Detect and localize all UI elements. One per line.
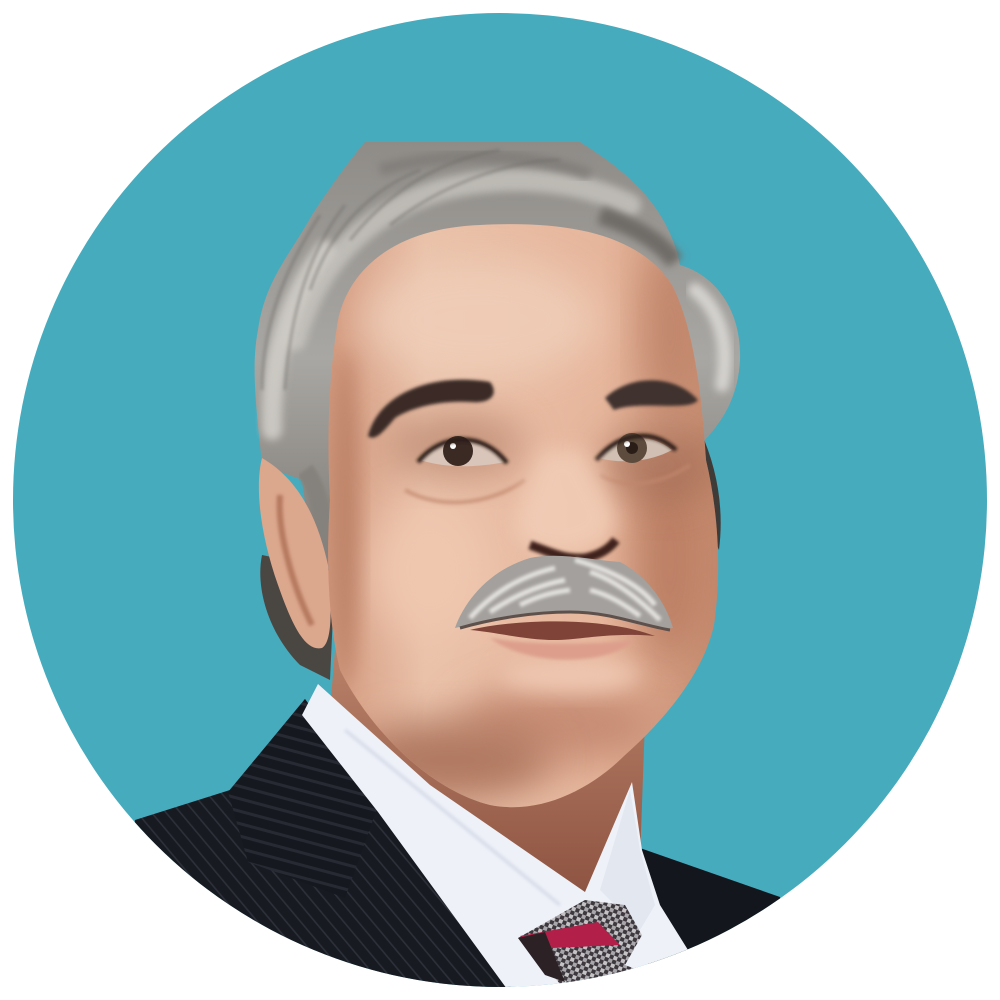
moustache — [455, 556, 673, 630]
right eye — [596, 433, 676, 463]
under-eye lines — [405, 465, 690, 502]
lower lip — [490, 638, 635, 660]
jacket — [134, 699, 780, 987]
nose — [515, 450, 616, 558]
shirt and collar — [302, 684, 690, 1000]
mouth — [470, 621, 655, 640]
necktie — [518, 900, 642, 984]
ear — [259, 458, 331, 648]
left eye — [418, 436, 507, 466]
neck — [330, 650, 645, 900]
back hair — [260, 555, 335, 680]
face — [328, 224, 720, 807]
figure — [110, 142, 800, 1000]
eyebrow right — [605, 380, 698, 410]
face shading — [360, 260, 600, 380]
eyebrow left — [368, 380, 494, 438]
hair — [255, 142, 740, 575]
